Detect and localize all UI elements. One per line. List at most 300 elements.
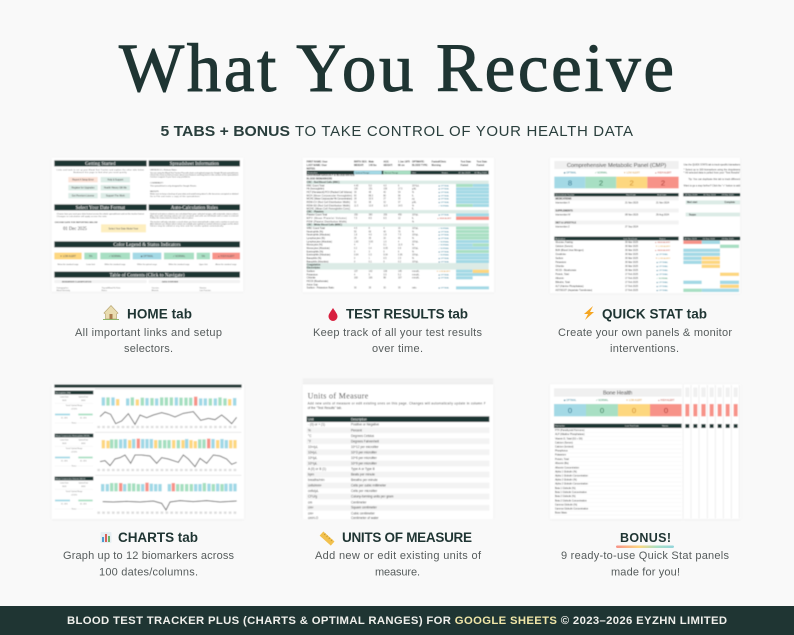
thumbnail: quick stat panel: ✓ NORMAL <box>656 277 669 280</box>
thumbnail: test results table: ◆ OPTIMAL <box>438 287 450 290</box>
thumbnail: test results table: 0.5 <box>383 258 387 260</box>
thumbnail: quick stat panel: Supps <box>689 214 697 216</box>
thumbnail: charts dashboard: 45 - 65% <box>80 417 87 419</box>
thumbnail: units of measure table: cm³ <box>308 511 313 515</box>
thumbnail: test results table: 69 cm <box>398 165 405 167</box>
thumbnail: test results table: OPTIMATE: <box>412 161 425 164</box>
thumbnail: test results table: % <box>412 245 414 247</box>
thumbnail: test results table: Sodium : Potassium Ratio <box>307 287 335 290</box>
thumbnail: test results table: 5.2 <box>398 274 402 276</box>
thumbnail: test results table: pg <box>412 199 415 201</box>
thumbnail: home tab spreadsheet: Thyroid/Blood Rx Ratio <box>102 286 120 289</box>
thumbnail: units of measure table: Breaths per minute <box>351 478 378 482</box>
thumbnail: quick stat panel: Last Test Date <box>623 237 638 240</box>
thumbnail: charts dashboard: Latest Date <box>60 439 69 442</box>
thumbnail: test results table: mmol/L <box>412 278 420 280</box>
thumbnail: test results table: 30 <box>383 288 387 290</box>
thumbnail: test results table: ◆ OPTIMAL <box>438 234 450 237</box>
thumbnail: home tab spreadsheet: ✓ NORMAL <box>109 255 122 258</box>
heading: quick stat tab: QUICK STAT tab <box>602 306 707 322</box>
thumbnail: test results table: HCT (Hematocrit) PCV (Packed Cell Volume) <box>307 191 352 194</box>
thumbnail: test results table: 1.00 <box>354 241 359 243</box>
thumbnail: home tab spreadsheet: VERSION 3.1 - Release Notes <box>150 169 177 172</box>
thumbnail: test results table: GASTROENTEROLOGY & BLOOD RATIOS <box>307 174 355 177</box>
panel: bonus <box>550 384 741 578</box>
thumbnail: test results table: ◆ OPTIMAL <box>438 277 450 280</box>
thumbnail: stacked quick stat panels: 0 <box>664 406 668 415</box>
thumbnail: test results table: 48 <box>369 192 372 194</box>
thumbnail: test results table: Potassium <box>307 273 318 276</box>
thumbnail: test results table: % <box>412 251 414 253</box>
thumbnail: quick stat panel: 30 Mar 2025 <box>625 269 639 272</box>
thumbnail: test results table: mmol/L <box>412 271 420 273</box>
thumbnail: test results table: 10³/µL <box>412 260 419 263</box>
thumbnail: quick stat panel: SUPPLEMENTS <box>555 210 573 212</box>
thumbnail: quick stat panel: Bilirubin, Total <box>555 281 570 284</box>
thumbnail: quick stat panel: ◆ OPTIMAL <box>564 172 577 175</box>
thumbnail: quick stat panel: HCO3 - Bicarbonate <box>555 269 577 272</box>
thumbnail: stacked quick stat panels <box>550 384 741 519</box>
thumbnail: test results table: 4.0 <box>383 185 387 187</box>
thumbnail: test results table: Hb (hemoglobin) <box>307 188 324 191</box>
thumbnail: charts dashboard: Trend / Optimal Range <box>66 447 82 450</box>
thumbnail: quick stat panel: * Select up to 100 biomarkers using the dropdowns <box>684 169 741 172</box>
thumbnail: test results table: RDW-CV (Red Cell Distribution Width) <box>307 201 350 204</box>
thumbnail: charts dashboard: Mean Corpuscular Volume (MCV) <box>56 477 86 480</box>
thumbnail: charts dashboard <box>52 384 244 519</box>
thumbnail: test results table: 32 <box>383 202 387 204</box>
thumbnail: charts dashboard: Trend / Optimal Range <box>66 490 82 493</box>
thumbnail: home tab spreadsheet: Auto-Calculation Rules <box>171 206 218 211</box>
thumbnail: quick stat panel: 08 Nov 2023 <box>625 214 639 216</box>
thumbnail: units of measure table: cm <box>308 500 313 504</box>
thumbnail: test results table: Test Date <box>461 161 472 164</box>
thumbnail: test results table: 0.04 <box>383 255 388 257</box>
thumbnail: home tab spreadsheet: Choose how you want your date format across the whole spreadsheet and set the tracker format <box>57 213 144 216</box>
icon: bar chart <box>100 532 112 543</box>
thumbnail: test results table: ◆ OPTIMAL <box>438 191 450 194</box>
thumbnail: charts dashboard: 40/65 <box>81 400 85 402</box>
thumbnail: test results table: 96 <box>398 195 401 197</box>
thumbnail: test results table: % <box>412 221 414 223</box>
thumbnail: units of measure table: Percent <box>351 428 362 432</box>
thumbnail: stacked quick stat panels: Calcium (Ionized) <box>555 446 574 449</box>
thumbnail: charts dashboard: 52 - 60% <box>61 417 68 419</box>
thumbnail: stacked quick stat panels: Alpha 1 Globulin (%) <box>555 470 577 473</box>
thumbnail: test results table: FIRST NAME: User <box>307 161 328 164</box>
thumbnail: test results table: Basophils (%) <box>307 257 322 260</box>
thumbnail: units of measure table: Cells per microliter <box>351 489 377 493</box>
thumbnail: stacked quick stat panels: Beta 1 Globulin (%) <box>555 487 576 490</box>
thumbnail: test results table: ◆ OPTIMAL <box>438 188 450 191</box>
thumbnail: stacked quick stat panels: Gamma Globulin Concentration <box>555 508 589 511</box>
thumbnail: units of measure table: - (0) or + (1) <box>308 423 325 427</box>
thumbnail: home tab spreadsheet: Within the standard range <box>105 263 125 266</box>
thumbnail: test results table: 32 <box>354 202 357 204</box>
thumbnail: home tab spreadsheet: Contact support if you have any problems <box>150 175 190 178</box>
description: home tab <box>75 327 222 355</box>
thumbnail: test results table: 40 <box>398 238 401 240</box>
thumbnail: test results table: MPV (Mean Platelet Volume) <box>307 217 347 220</box>
thumbnail: test results table: 145 <box>398 271 403 273</box>
thumbnail: charts dashboard: 45 - 65% <box>80 460 87 462</box>
thumbnail: stacked quick stat panels: Beta 1 Globulin Concentration <box>555 491 587 494</box>
thumbnail: quick stat panel: Chloride <box>555 265 565 268</box>
icon: blood drop <box>328 308 338 321</box>
thumbnail: units of measure table: Units of Measure <box>308 391 369 400</box>
thumbnail: units of measure table: Cells per cubic millimeter <box>351 484 386 488</box>
thumbnail: test results table: AGE: <box>383 161 389 164</box>
thumbnail: units of measure table: Positive or Negative <box>351 423 379 427</box>
thumbnail: test results table: 150 <box>383 215 388 217</box>
thumbnail: test results table: fL <box>412 208 415 210</box>
thumbnail: test results table: Platelet Count Total <box>307 214 328 217</box>
thumbnail: home tab spreadsheet: 5% <box>89 256 92 258</box>
thumbnail: stacked quick stat panels: Alpha 2 Globulin Concentration <box>555 483 589 486</box>
thumbnail: charts dashboard: Trend / Optimal Range <box>66 404 82 407</box>
thumbnail: units of measure table: °C <box>308 434 312 438</box>
thumbnail: stacked quick stat panels: ALP (Alkaline Phosphatase) <box>555 433 585 436</box>
thumbnail: test results table: 0.04 <box>354 255 359 257</box>
thumbnail: home tab spreadsheet: Color Legend & Status Indicators <box>113 243 181 248</box>
thumbnail: home tab spreadsheet: Getting Started <box>85 162 116 167</box>
thumbnail: test results table: 54 <box>398 192 401 194</box>
thumbnail: quick stat panel: ALT (Alanine Phosphatase) <box>555 285 584 288</box>
thumbnail: test results table: Male <box>369 162 375 164</box>
thumbnail: stacked quick stat panels: ▲ HIGH ALERT <box>658 399 675 402</box>
thumbnail: stacked quick stat panels: Phosphorus <box>555 450 568 453</box>
thumbnail: home tab spreadsheet: Liver Function <box>199 289 211 292</box>
thumbnail: test results table: 17.5 <box>398 189 403 191</box>
thumbnail: test results table: ✓ NORMAL <box>438 240 450 243</box>
thumbnail: test results table: 4.40 <box>354 185 359 187</box>
thumbnail: home tab spreadsheet: ▲ HIGH ALERT <box>218 255 235 258</box>
icon: lightning bolt <box>584 306 594 320</box>
thumbnail: home tab spreadsheet: You are using the Blood Test Tracker Plus with charts and optimal ranges for Google Sheets spreadsheets <box>150 171 238 174</box>
description: charts tab: Graph up to 12 biomarkers across <box>63 550 234 562</box>
thumbnail: stacked quick stat panels: ✓ NORMAL <box>596 399 609 402</box>
thumbnail: units of measure table: cells/mm³ <box>308 484 322 488</box>
thumbnail: home tab spreadsheet: Demographics <box>57 287 69 289</box>
thumbnail: test results table: 140 lbs <box>369 164 377 167</box>
thumbnail: test results table: 50 <box>354 231 357 233</box>
heading: bonus: BONUS! <box>620 531 671 545</box>
thumbnail: quick stat panel: Sodium <box>555 258 563 260</box>
thumbnail: home tab spreadsheet: Spreadsheet Information <box>170 162 219 167</box>
thumbnail: quick stat panel: Want to go a step further? Click the "+" button to add <box>684 184 741 187</box>
thumbnail: test results table: fL <box>412 195 415 197</box>
thumbnail: charts dashboard: 52 - 60% <box>61 460 68 462</box>
thumbnail: home tab spreadsheet: ◆ OPTIMAL <box>141 255 154 258</box>
thumbnail: home tab spreadsheet: Optimal and status columns are calculated from your selected ranges, with automatic status colours <box>150 213 238 216</box>
thumbnail: quick stat panel: 21 Nov 2023 <box>625 202 639 204</box>
thumbnail: test results table: HEIGHT: <box>383 165 393 167</box>
thumbnail: test results table: 0 <box>383 261 385 263</box>
thumbnail: quick stat panel: BUN (Blood Urea Nitrogen) <box>555 249 584 252</box>
thumbnail: test results table: MCHC (Mean Cell Hemoglobin Conc) <box>307 207 350 210</box>
thumbnail: test results table: % <box>412 231 414 233</box>
thumbnail: test results table: HCO3 (Bicarbonate) <box>307 280 328 283</box>
thumbnail: quick stat panel: 21 Nov 2024 <box>656 202 670 204</box>
thumbnail: home tab spreadsheet: Within the standard range <box>169 263 189 266</box>
description: test results tab: Keep track of all your test results <box>313 327 482 339</box>
thumbnail: quick stat panel: 30 Mar 2025 <box>625 265 639 268</box>
thumbnail: test results table: ◆ OPTIMAL <box>438 194 450 197</box>
thumbnail: test results table: Neutrophils (Absolute) <box>307 234 330 237</box>
thumbnail: test results table: Monocytes (Absolute) <box>307 247 330 250</box>
thumbnail: test results table: Normal Range <box>384 171 399 174</box>
footer bar <box>0 606 794 635</box>
description: quick stat tab: interventions. <box>610 343 679 355</box>
thumbnail: quick stat panel: 30 Mar 2025 <box>625 257 639 260</box>
thumbnail: test results table: 4 <box>354 245 356 247</box>
thumbnail: test results table: 25 <box>354 238 357 240</box>
thumbnail: test results table: 0.36 <box>398 255 403 257</box>
description: units of measure tab <box>315 550 482 578</box>
thumbnail: home tab spreadsheet: ▼ LOW ALERT <box>60 255 77 258</box>
thumbnail: home tab spreadsheet: Blood Chemistry <box>57 289 70 292</box>
thumbnail: charts dashboard: Status <box>72 465 77 468</box>
thumbnail: test results table: LAST NAME: User <box>307 164 327 167</box>
thumbnail: quick stat panel: Calcium (Serum) <box>555 245 573 248</box>
thumbnail: test results table: 0.2 <box>354 248 358 250</box>
thumbnail: quick stat panel: * All selected data is pulled from your "Test Results" <box>684 172 740 175</box>
thumbnail: units of measure table: Beats per minute <box>351 473 375 477</box>
thumbnail: test results table: 60 <box>369 231 372 233</box>
thumbnail: test results table: 11.9 <box>398 245 403 247</box>
thumbnail: charts dashboard: Optimal Date <box>78 482 88 485</box>
icon: house <box>103 306 119 320</box>
thumbnail: test results table: 8 <box>369 228 371 230</box>
thumbnail: test results table: Fasted <box>461 164 469 167</box>
thumbnail: test results table: ▼ LOW ALERT <box>436 270 451 273</box>
thumbnail: quick stat panel: Intervention W <box>555 213 571 216</box>
thumbnail: home tab spreadsheet: Values may be edited at any time and the results update automatically <box>150 225 224 228</box>
thumbnail: test results table: BIRTH SEX: <box>354 162 367 164</box>
thumbnail: test results table: 70 <box>398 231 401 233</box>
thumbnail: charts dashboard: 30/45 <box>62 486 66 488</box>
thumbnail: test results table: 40 <box>383 192 387 194</box>
thumbnail: quick stat panel: ▲ HIGH ALERT <box>655 241 671 244</box>
thumbnail: home tab spreadsheet: Go to File and make a copy of this spreadsheet. <box>150 195 200 198</box>
thumbnail: quick stat panel: 17 Feb 2025 <box>625 282 639 284</box>
thumbnail: home tab spreadsheet: Get Premium License <box>72 195 95 198</box>
thumbnail: test results table: Eosinophils (%) <box>307 250 323 253</box>
description: bonus <box>561 550 730 578</box>
thumbnail: charts dashboard: 30/45 <box>62 443 66 445</box>
thumbnail: test results table: 0.1 <box>383 245 387 247</box>
thumbnail: test results table: 0.9 <box>398 248 402 250</box>
thumbnail: charts dashboard: Optimal Date <box>78 396 88 399</box>
thumbnail: charts dashboard: Latest Date <box>60 482 69 485</box>
thumbnail: quick stat panel: 29 Mar 2025 <box>722 237 735 240</box>
thumbnail: home tab spreadsheet: Above the standard range <box>215 263 237 266</box>
thumbnail: stacked quick stat panels: Last Test Date <box>625 425 640 428</box>
thumbnail: stacked quick stat panels: Alpha 2 Globulin (%) <box>555 479 577 482</box>
thumbnail: test results table: 1 <box>369 258 371 260</box>
thumbnail: home tab spreadsheet: Table of Contents (Click to Navigate) <box>109 273 185 278</box>
thumbnail: test results table: Lymphocytes (%) <box>307 237 325 240</box>
thumbnail: test results table: 4 <box>398 241 400 243</box>
description: quick stat tab <box>558 327 732 355</box>
thumbnail: test results table: % <box>412 205 414 207</box>
thumbnail: quick stat panel: Protein, Total <box>555 273 569 276</box>
thumbnail: test results table: fL <box>412 218 415 220</box>
thumbnail: home tab spreadsheet: 5% <box>202 256 205 258</box>
thumbnail: home tab spreadsheet: Any rows with missing values are not counted, and cells are left blank until a value is entered <box>150 215 239 218</box>
thumbnail: test results table: 40 <box>383 231 387 233</box>
thumbnail: units of measure table: Type A or Type B <box>351 467 375 471</box>
description: home tab: selectors. <box>124 343 173 355</box>
thumbnail: test results table: MCHC (Mean Corpuscular Hb Concentration) <box>307 198 352 201</box>
thumbnail: units of measure table: Add new units of measure or edit existing ones on this page. Changes will automatically update in column F <box>308 402 486 406</box>
thumbnail: test results table: 39 <box>354 192 357 194</box>
thumbnail: home tab spreadsheet <box>52 158 243 292</box>
thumbnail: test results table: 4 <box>383 228 385 230</box>
thumbnail: test results table: 5 <box>369 274 371 276</box>
thumbnail: quick stat panel: MEDICATIONS <box>555 197 572 200</box>
title: What You Receive <box>119 30 674 106</box>
thumbnail: test results table: WBC Count Total <box>307 227 325 230</box>
thumbnail: quick stat panel: 17 Feb 2025 <box>625 290 639 292</box>
thumbnail: units of measure table: A (0) or B (1) <box>308 467 326 471</box>
thumbnail: test results table: 10³/µL <box>412 214 419 217</box>
thumbnail: units of measure table <box>303 378 493 522</box>
panel: charts tab <box>52 384 244 578</box>
thumbnail: units of measure table: cm² <box>308 506 313 510</box>
thumbnail: charts dashboard: -12.53% <box>71 494 78 496</box>
thumbnail: quick stat panel: ◆ OPTIMAL <box>656 265 669 268</box>
thumbnail: charts dashboard: 40/65 <box>81 486 85 488</box>
thumbnail: test results table: 1.8 <box>354 235 358 237</box>
subtitle: 5 TABS + BONUS <box>160 123 290 140</box>
thumbnail: test results table: 22 May 2024 <box>474 172 488 174</box>
thumbnail: quick stat panel: Glucose, Fasting <box>555 241 574 244</box>
thumbnail: test results table: Coagulation <box>307 263 321 266</box>
thumbnail: test results table: 20 <box>383 238 387 240</box>
thumbnail: test results table: 6 <box>398 185 400 187</box>
thumbnail: quick stat panel: Use the QUICK STATS tab to track specific biomarkers <box>684 163 741 166</box>
thumbnail: test results table: ◆ OPTIMAL <box>438 214 450 217</box>
thumbnail: home tab spreadsheet: ✓ NORMAL <box>173 255 186 258</box>
icon: ruler <box>320 532 334 546</box>
thumbnail: test results table: 33 <box>398 199 401 201</box>
thumbnail: test results table <box>303 158 494 292</box>
thumbnail: charts dashboard: 40/65 <box>81 443 85 445</box>
thumbnail: test results table: ◆ OPTIMAL <box>438 237 450 240</box>
thumbnail: home tab spreadsheet: Within the optimal range <box>137 263 157 266</box>
thumbnail: quick stat panel: ◆ OPTIMAL <box>656 273 669 276</box>
thumbnail: test results table: ◆ OPTIMAL <box>438 198 450 201</box>
thumbnail: test results table: ◆ OPTIMAL <box>438 230 450 233</box>
thumbnail: test results table: 10³/µL <box>412 254 419 257</box>
thumbnail: charts dashboard: Status <box>72 508 77 511</box>
rainbow underline <box>616 546 674 548</box>
thumbnail: home tab spreadsheet: Minerals <box>152 290 159 292</box>
thumbnail: quick stat panel: Biomarker <box>555 237 565 240</box>
thumbnail: stacked quick stat panels: 0 <box>600 406 604 415</box>
thumbnail: test results table: 0.4 <box>369 248 373 250</box>
thumbnail: units of measure table: 10⁶/µL <box>308 456 318 460</box>
thumbnail: home tab spreadsheet: CHOOSE DATE FOR REPORTING BELOW <box>55 221 98 224</box>
thumbnail: quick stat panel: Start Date <box>626 193 637 196</box>
thumbnail: units of measure table: 10⁹/µL <box>308 462 318 466</box>
thumbnail: stacked quick stat panels: Albumin (Bs) <box>555 462 569 465</box>
thumbnail: test results table: ✓ NORMAL <box>438 204 450 207</box>
thumbnail: units of measure table: Colony-forming units per gram <box>351 495 394 499</box>
thumbnail: quick stat panel: ◆ OPTIMAL <box>656 289 669 292</box>
thumbnail: test results table: 12 <box>398 218 401 220</box>
thumbnail: charts dashboard: 52 - 60% <box>61 503 68 505</box>
thumbnail: quick stat panel: Intervention X <box>555 201 570 204</box>
description: bonus: made for you! <box>611 566 680 578</box>
thumbnail: stacked quick stat panels: Beta 2 Globulin (%) <box>555 495 576 498</box>
thumbnail: units of measure table: Square centimeter <box>351 506 377 510</box>
thumbnail: charts dashboard: Hemoglobin (Hb) <box>56 392 71 394</box>
thumbnail: test results table: 6 <box>398 251 400 253</box>
thumbnail: quick stat panel: 29 Mar 2025 <box>722 193 735 196</box>
thumbnail: quick stat panel: 2 <box>599 178 603 187</box>
thumbnail: quick stat panel: 30 Mar 2025 <box>625 241 639 244</box>
thumbnail: test results table: g/dL <box>412 202 417 204</box>
thumbnail: test results table: 106 <box>369 278 373 280</box>
thumbnail: quick stat panel: ▼ LOW ALERT <box>624 172 640 175</box>
thumbnail: test results table: 100 <box>354 278 359 280</box>
thumbnail: charts dashboard: 30/45 <box>62 400 66 402</box>
thumbnail: quick stat panel: 8 <box>568 178 572 187</box>
heading: charts tab: CHARTS tab <box>118 530 198 545</box>
thumbnail: quick stat panel: Complete <box>724 201 736 204</box>
thumbnail: stacked quick stat panels: Potassium <box>555 454 566 457</box>
thumbnail: home tab spreadsheet: Follow the instructions to keep the rules in place <box>150 217 194 220</box>
thumbnail: test results table: Lymphocytes (Absolute) <box>307 240 332 243</box>
thumbnail: charts dashboard: -12.53% <box>71 408 78 410</box>
thumbnail: home tab spreadsheet: Select Your Date Model Year <box>109 227 138 230</box>
thumbnail: quick stat panel: Status <box>659 237 665 240</box>
thumbnail: stacked quick stat panels: Beta 2 Globulin Concentration <box>555 499 587 502</box>
thumbnail: test results table: 10³/µL <box>412 227 419 230</box>
thumbnail: test results table: Neutrophils (%) <box>307 230 323 233</box>
thumbnail: quick stat panel: ▲ HIGH ALERT <box>655 172 672 175</box>
thumbnail: units of measure table: % <box>308 428 311 432</box>
heading: test results tab: TEST RESULTS tab <box>346 306 468 322</box>
thumbnail: test results table: 4.5 <box>354 228 358 230</box>
thumbnail: charts dashboard: Status <box>72 422 77 425</box>
thumbnail: test results table: ratio <box>412 287 417 290</box>
thumbnail: test results table: ✓ NORMAL <box>438 247 450 250</box>
thumbnail: home tab spreadsheet: Make sure to keep a backup of your data and avoid losing data if a file becomes corrupted or deleted <box>150 193 239 196</box>
thumbnail: quick stat panel: Potassium <box>555 261 566 264</box>
thumbnail: test results table: 35 <box>369 288 372 290</box>
thumbnail: units of measure table: Description <box>351 417 367 421</box>
thumbnail: stacked quick stat panels: Protein, Total <box>555 458 569 461</box>
thumbnail: stacked quick stat panels: ▼ LOW ALERT <box>626 399 643 402</box>
thumbnail: test results table: BLOOD TYPE: <box>412 165 428 167</box>
thumbnail: quick stat panel: Tip: You can duplicate this tab to track different <box>688 178 740 181</box>
thumbnail: stacked quick stat panels: Vitamin D, Total (D2 + D3) <box>555 437 583 440</box>
thumbnail: test results table: 28 <box>354 199 357 201</box>
thumbnail: quick stat panel: DIET & LIFESTYLE <box>555 222 577 224</box>
bar chart 2 <box>103 439 235 448</box>
thumbnail: test results table: WEIGHT: <box>354 165 364 167</box>
thumbnail: test results table: CBC - White Blood Cells (WBC) <box>307 224 342 227</box>
thumbnail: test results table: 13.8 <box>369 205 374 207</box>
thumbnail: test results table: 11.5 <box>354 205 359 207</box>
thumbnail: test results table: % <box>412 258 414 260</box>
thumbnail: test results table: 98 <box>383 278 387 280</box>
thumbnail: test results table: Test Date <box>477 161 488 164</box>
thumbnail: units of measure table: Degrees Celsius <box>351 434 375 438</box>
